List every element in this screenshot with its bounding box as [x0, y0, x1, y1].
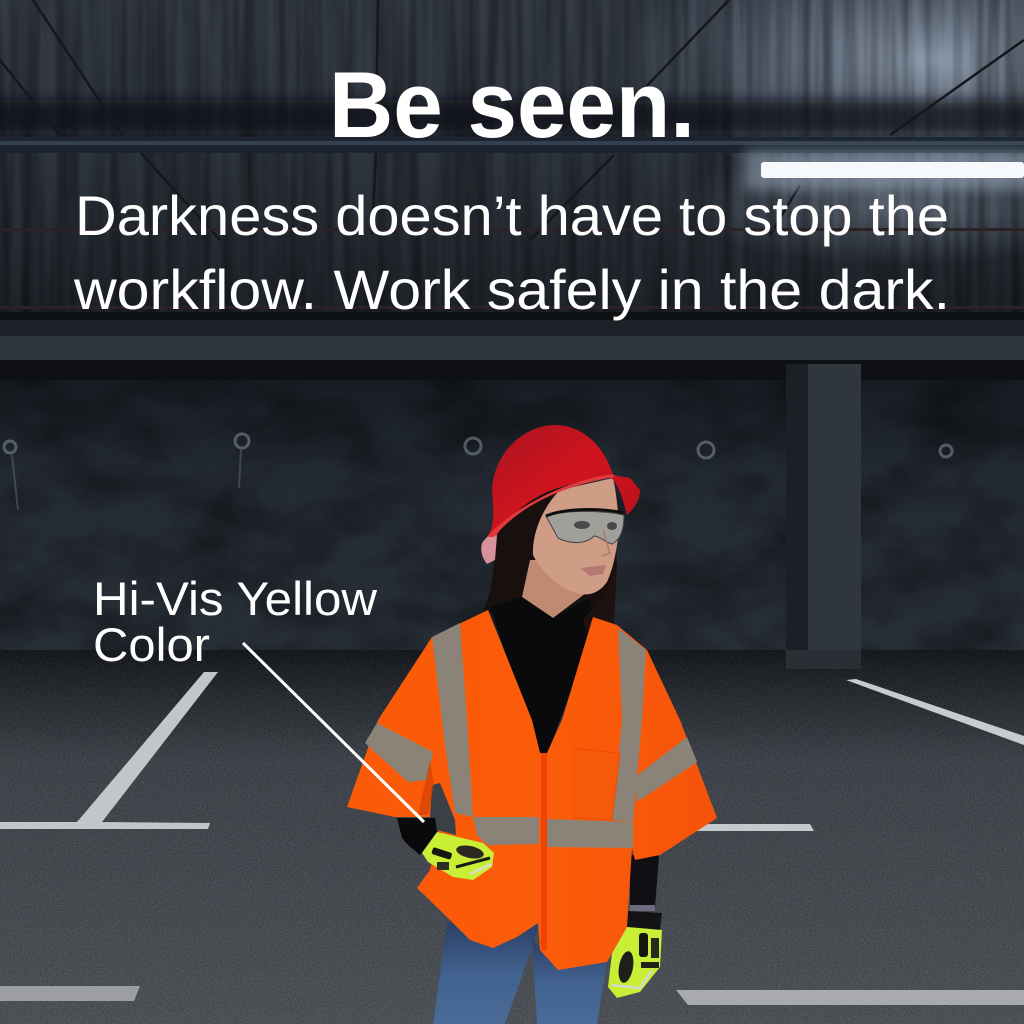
- turtleneck: [490, 597, 594, 755]
- callout label: Color: [93, 618, 210, 671]
- sleeve shadow: [418, 760, 434, 815]
- wall: [0, 380, 1024, 652]
- right forearm sleeve: [630, 855, 659, 911]
- zipper: [541, 753, 547, 950]
- neck: [522, 560, 590, 618]
- worker figure: [347, 425, 717, 1024]
- ceiling light: [745, 150, 1024, 190]
- floor: [0, 650, 1024, 1024]
- nose and lips: [580, 530, 610, 576]
- right glove: [608, 911, 662, 998]
- jeans: [433, 923, 607, 1024]
- hair: [483, 488, 617, 650]
- reflective stripes: [365, 623, 697, 848]
- parking lines: [0, 672, 1024, 1005]
- subtitle line 2: workflow. Work safely in the dark.: [73, 258, 950, 321]
- pillar: [786, 364, 861, 669]
- ceiling: [0, 0, 1024, 335]
- safety glasses: [546, 510, 624, 544]
- face: [533, 478, 618, 594]
- subtitle line 1: Darkness doesn’t have to stop the: [75, 184, 949, 247]
- title: Be seen.: [329, 52, 695, 157]
- beam: [0, 320, 1024, 382]
- background gap under sleeve: [430, 783, 456, 835]
- callout label: [93, 572, 378, 671]
- callout pointer line: [243, 643, 424, 822]
- wall bolts: [4, 434, 952, 510]
- left glove and cuff: [397, 818, 494, 880]
- hard hat: [481, 425, 640, 564]
- front hair strand: [583, 563, 617, 650]
- callout label: Hi-Vis Yellow: [93, 572, 378, 625]
- pocket: [572, 748, 620, 820]
- hi-vis vest: [347, 610, 717, 970]
